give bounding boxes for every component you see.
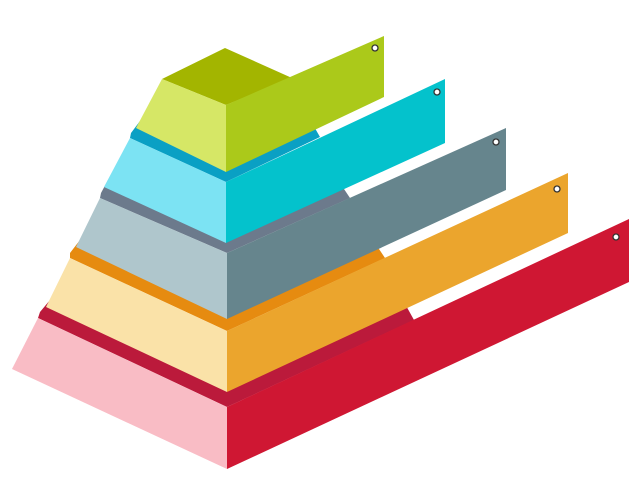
layer 5: red base xyxy=(12,219,629,469)
layer 3: gray xyxy=(76,128,506,319)
layer 4: orange xyxy=(46,173,568,392)
layer 2: cyan xyxy=(104,79,445,243)
layer 1: green top xyxy=(136,36,384,172)
